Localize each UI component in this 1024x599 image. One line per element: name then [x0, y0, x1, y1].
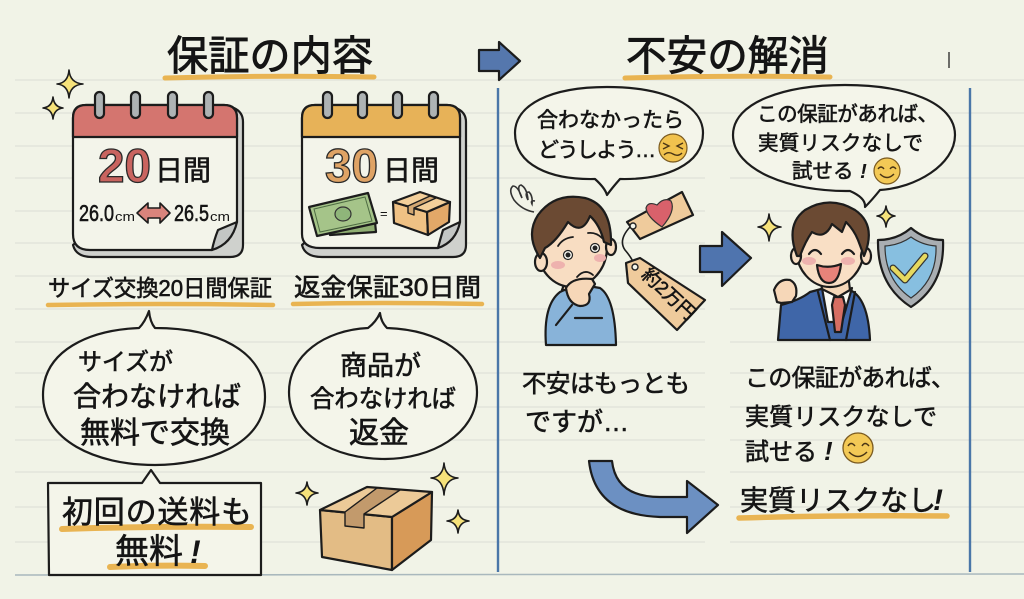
- size 26.0cm to 26.5cm: 26.5: [174, 200, 209, 226]
- label: refund: 返金保証30日間: [294, 274, 481, 302]
- panel: calendar 20 days: 日間: [155, 155, 211, 186]
- text: guarantee message: [745, 365, 955, 466]
- worry scribble: [511, 185, 535, 212]
- illustration: worried man: [511, 185, 616, 345]
- calendar rings: [95, 92, 213, 118]
- icon: sparkles near parcel: [296, 463, 469, 533]
- panel: calendar 30 days: =: [380, 206, 388, 221]
- label: size exchange: サイズ交換20日間保証: [48, 275, 272, 301]
- callout: relieved speech bubble: 試せる: [792, 160, 854, 183]
- icon: sparkles top left: [43, 70, 83, 119]
- panel: calendar 20 days: [73, 92, 243, 257]
- icon: banknotes: [309, 193, 377, 236]
- callout: size bubble: 合わなければ: [73, 381, 241, 412]
- icon: shield: [878, 228, 943, 307]
- callout: refund bubble: 合わなければ: [310, 385, 456, 413]
- illustration: happy man: [774, 202, 871, 340]
- size 26.0cm to 26.5cm: 26.0: [79, 200, 114, 226]
- panel: calendar 30 days: [302, 92, 466, 257]
- callout: relieved speech bubble: [733, 85, 955, 207]
- arrow: header: [479, 42, 520, 80]
- heading: 保証の内容: 保証の内容: [167, 33, 373, 79]
- size 26.0cm to 26.5cm: cm: [115, 209, 135, 224]
- arrow: curved: [589, 461, 718, 533]
- callout: size bubble: [43, 311, 265, 465]
- text: guarantee message: 実質リスクなしで: [745, 404, 937, 431]
- icon: tag cord: [622, 227, 635, 266]
- callout: worried speech bubble: [515, 87, 703, 195]
- icon: small parcel: [393, 192, 450, 235]
- arrow: worried to relieved: [700, 232, 751, 286]
- callout: size bubble: 無料で交換: [80, 417, 230, 450]
- number 30: 30: [325, 139, 378, 192]
- calendar rings: [323, 92, 438, 118]
- icon: sparkles near man: [758, 206, 895, 241]
- icon: price tag: 約2万円: [638, 264, 700, 324]
- callout: refund bubble: 返金: [349, 417, 409, 450]
- number 20: 20: [98, 139, 151, 192]
- text: guarantee message: !: [824, 436, 833, 466]
- callout: refund bubble: 商品が: [340, 351, 421, 381]
- text: anxiety: [522, 370, 690, 437]
- callout: worried speech bubble: どうしよう…: [538, 139, 656, 162]
- text: anxiety: ですが…: [525, 407, 629, 437]
- text: guarantee message: 試せる: [745, 439, 817, 466]
- text: no real risk: !: [933, 484, 943, 517]
- icon: large parcel: [320, 487, 432, 570]
- heading: 不安の解消: 不安の解消: [626, 33, 829, 79]
- callout: free shipping box: !: [190, 534, 201, 570]
- panel: calendar 30 days: 日間: [383, 155, 439, 186]
- icon: heart tag: [627, 192, 693, 239]
- callout: relieved speech bubble: この保証があれば、: [757, 103, 938, 126]
- callout: free shipping box: 初回の送料も: [62, 495, 252, 530]
- size 26.0cm to 26.5cm: [79, 200, 230, 226]
- callout: worried speech bubble: 合わなかったら: [537, 109, 684, 132]
- callout: refund bubble: [289, 313, 477, 459]
- text: guarantee message: この保証があれば、: [745, 365, 955, 392]
- emoji: troubled: [659, 134, 687, 162]
- callout: free shipping box: [48, 470, 261, 575]
- icon: price tag: [626, 258, 705, 330]
- text: no real risk: 実質リスクなし: [740, 485, 936, 516]
- emoji: smile large: [843, 433, 873, 463]
- callout: relieved speech bubble: !: [860, 160, 867, 183]
- text: anxiety: 不安はもっとも: [522, 370, 690, 398]
- callout: size bubble: サイズが: [78, 349, 173, 376]
- callout: free shipping box: 無料: [115, 533, 183, 571]
- callout: relieved speech bubble: 実質リスクなしで: [758, 132, 923, 155]
- emoji: smile: [874, 158, 900, 184]
- size 26.0cm to 26.5cm: cm: [210, 209, 230, 224]
